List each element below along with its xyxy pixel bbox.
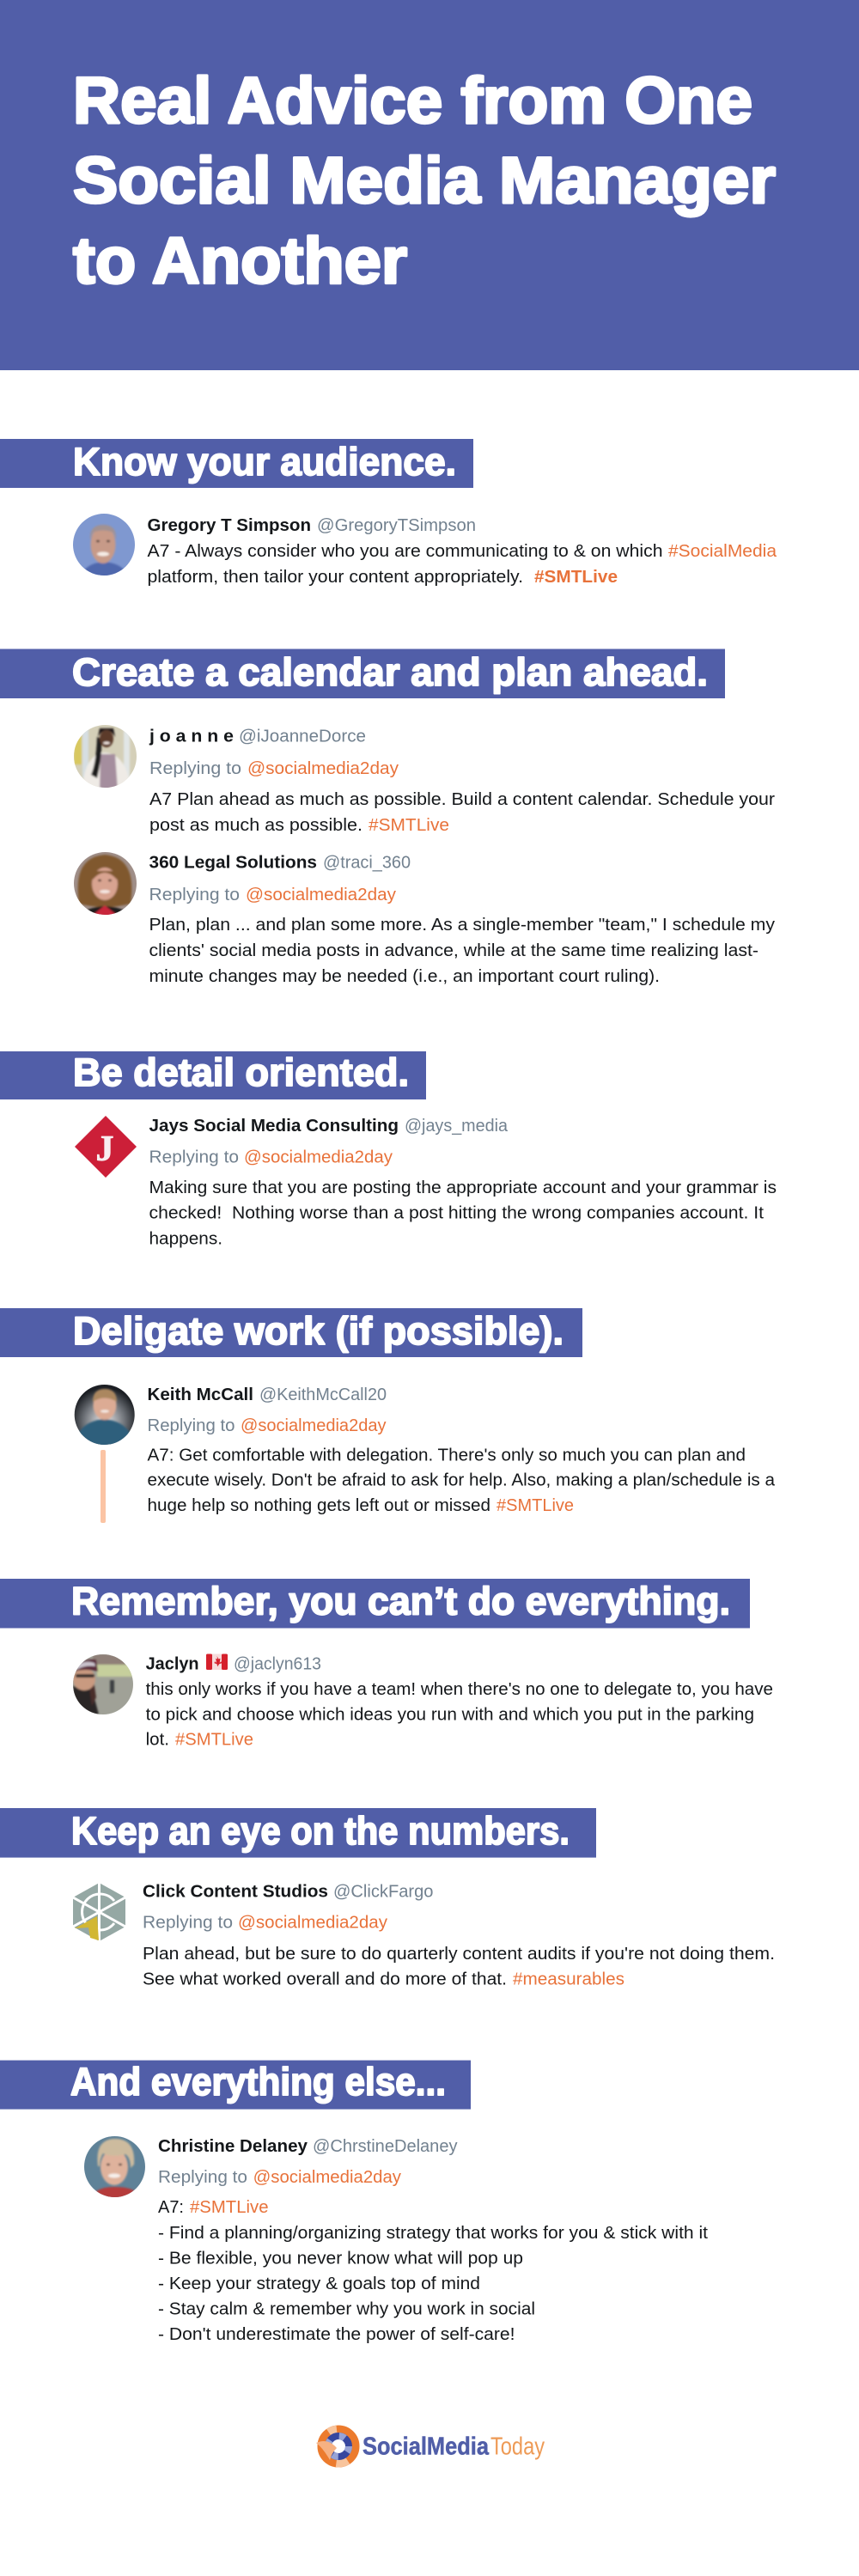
title banner: Social Media Manager (73, 144, 776, 217)
tweet: Keith McCall: Replying to (148, 1416, 235, 1435)
tweet: Jays Social Media Consulting: checked! Nothing worse than a post hitting the wrong companies account. It (149, 1204, 764, 1223)
tweet: joanne (74, 725, 775, 835)
tweet: Christine Delaney: - Don't underestimate the power of self-care! (158, 2325, 515, 2344)
tweet: 360 Legal Solutions: clients' social media posts in advance, while at the same time realizing last- (149, 941, 758, 960)
tweet: Keith McCall: A7: Get comfortable with delegation. There's only so much you can plan and (148, 1446, 746, 1465)
icon: Keith avatar (74, 1385, 135, 1447)
icon: 360 Legal avatar (74, 852, 137, 919)
tweet: Christine Delaney: @ChrstineDelaney (313, 2137, 457, 2156)
icon: Christine avatar (84, 2136, 145, 2199)
tweet: Christine Delaney: A7: (158, 2198, 184, 2217)
tweet: Click Content Studios: #measurables (513, 1970, 624, 1988)
icon: Jaclyn avatar (73, 1654, 133, 1714)
tweet: Christine Delaney: #SMTLive (190, 2198, 268, 2217)
tweet: Jaclyn: #SMTLive (175, 1731, 253, 1750)
tweet: Click Content Studios: @socialmedia2day (238, 1914, 387, 1933)
icon: joanne avatar (74, 725, 137, 790)
tweet: joanne: Replying to (149, 759, 241, 778)
tweet: joanne: @iJoanneDorce (239, 727, 366, 746)
logo: Social Media Today: Today (490, 2433, 545, 2460)
tweet: Jays Social Media Consulting: Replying to (149, 1148, 239, 1167)
tweet: Click Content Studios: See what worked overall and do more of that. (143, 1970, 507, 1988)
panel: and everything else (0, 2060, 708, 2344)
panel: keep an eye on the numbers (0, 1808, 775, 1988)
tweet: joanne: @socialmedia2day (247, 759, 399, 778)
heading: remember: Remember, you can’t do everything. (71, 1579, 730, 1623)
tweet: Keith McCall: execute wisely. Don't be afraid to ask for help. Also, making a plan/schedule is a (148, 1471, 776, 1490)
tweet: Jays Social Media Consulting: @jays_media (405, 1117, 509, 1136)
tweet: joanne: j o a n n e (149, 727, 234, 746)
heading: everything else: And everything else... (70, 2060, 446, 2104)
tweet: 360 Legal Solutions: Plan, plan ... and plan some more. As a single-member "team," I schedule my (149, 916, 775, 935)
tweet: Jaclyn: to pick and choose which ideas you run with and which you put in the parking (146, 1706, 754, 1725)
heading: delegate work: Deligate work (if possible). (73, 1309, 564, 1353)
tweet: Gregory T Simpson (73, 514, 777, 587)
tweet: 360 Legal Solutions (74, 852, 775, 986)
tweet: Christine Delaney: Replying to (158, 2168, 247, 2187)
panel: know your audience (0, 439, 777, 587)
tweet: 360 Legal Solutions: Replying to (149, 886, 240, 904)
tweet: Keith McCall: #SMTLive (497, 1496, 574, 1515)
tweet: Christine Delaney: @socialmedia2day (253, 2168, 401, 2187)
tweet: 360 Legal Solutions: @traci_360 (323, 854, 411, 873)
tweet: 360 Legal Solutions: minute changes may be needed (i.e., an important court ruling). (149, 967, 660, 986)
tweet: 360 Legal Solutions: @socialmedia2day (246, 886, 396, 904)
tweet: Christine Delaney: Christine Delaney (158, 2137, 308, 2156)
logo: Social Media Today: SocialMedia (362, 2433, 490, 2460)
tweet: Click Content Studios: Plan ahead, but be sure to do quarterly content audits if you're not doing them. (143, 1945, 775, 1964)
panel: remember (0, 1579, 773, 1750)
tweet: Jays Social Media Consulting: happens. (149, 1230, 222, 1249)
panel: be detail oriented (0, 1050, 777, 1249)
icon: Jays diamond logo (75, 1116, 137, 1178)
tweet: Gregory T Simpson: #SMTLive (534, 568, 618, 587)
panel: create a calendar (0, 649, 775, 986)
tweet: Jays Social Media Consulting: @socialmedia2day (244, 1148, 393, 1167)
tweet: Jaclyn: lot. (146, 1731, 169, 1750)
tweet: Jays Social Media Consulting: Making sure that you are posting the appropriate account and your grammar is (149, 1178, 777, 1197)
tweet: Keith McCall: @socialmedia2day (241, 1416, 387, 1435)
tweet: Keith McCall (74, 1385, 776, 1523)
icon: logo ring (316, 2429, 356, 2463)
tweet: Jaclyn: @jaclyn613 (234, 1654, 321, 1673)
tweet: Jays Social Media Consulting: Jays Social Media Consulting (149, 1117, 399, 1136)
tweet: Jaclyn: Jaclyn (146, 1654, 199, 1673)
tweet: Keith McCall: @KeithMcCall20 (259, 1385, 387, 1404)
tweet: Gregory T Simpson: @GregoryTSimpson (317, 516, 476, 535)
tweet: Gregory T Simpson: platform, then tailor your content appropriately. (148, 568, 523, 587)
heading: know your audience: Know your audience. (73, 440, 456, 484)
tweet: Christine Delaney (84, 2136, 708, 2344)
tweet: joanne: A7 Plan ahead as much as possible. Build a content calendar. Schedule your (149, 790, 775, 809)
tweet: Christine Delaney: - Find a planning/organizing strategy that works for you & stick with it (158, 2224, 708, 2243)
tweet: Gregory T Simpson: #SocialMedia (668, 542, 777, 561)
tweet: Click Content Studios (73, 1883, 775, 1988)
tweet: Click Content Studios: Replying to (143, 1914, 233, 1933)
heading: numbers: Keep an eye on the numbers. (71, 1809, 570, 1853)
icon: Jays diamond logo: J (96, 1130, 113, 1169)
tweet: Jaclyn: this only works if you have a team! when there's no one to delegate to, you have (146, 1680, 773, 1699)
heading: create a calendar: Create a calendar and plan ahead. (72, 650, 708, 694)
tweet: Jaclyn (73, 1654, 773, 1750)
tweet: joanne: #SMTLive (369, 816, 449, 835)
icon: Click Content hexagon logo (73, 1883, 125, 1941)
tweet: Keith McCall: huge help so nothing gets left out or missed (148, 1496, 490, 1515)
tweet: joanne: post as much as possible. (149, 816, 362, 835)
thread line (101, 1450, 106, 1523)
tweet: Keith McCall: Keith McCall (148, 1385, 253, 1404)
tweet: Christine Delaney: - Be flexible, you never know what will pop up (158, 2250, 523, 2268)
tweet: Christine Delaney: - Stay calm & remember why you work in social (158, 2300, 535, 2319)
panel: delegate work (0, 1308, 776, 1523)
tweet: Gregory T Simpson: A7 - Always consider who you are communicating to & on which (148, 542, 663, 561)
tweet: 360 Legal Solutions: 360 Legal Solutions (149, 854, 317, 873)
heading: be detail oriented: Be detail oriented. (73, 1050, 409, 1094)
icon: Gregory avatar (73, 514, 135, 577)
tweet: Jays Social Media Consulting (75, 1116, 777, 1249)
title banner: to Another (73, 225, 407, 297)
logo: Social Media Today (316, 2429, 545, 2463)
title banner (0, 0, 859, 370)
icon: Canadian flag (206, 1654, 228, 1670)
tweet: Gregory T Simpson: Gregory T Simpson (148, 516, 311, 535)
tweet: Christine Delaney: - Keep your strategy & goals top of mind (158, 2275, 480, 2293)
tweet: Click Content Studios: Click Content Studios (143, 1883, 328, 1902)
tweet: Click Content Studios: @ClickFargo (333, 1883, 433, 1902)
title banner: Real Advice from One (73, 64, 752, 137)
